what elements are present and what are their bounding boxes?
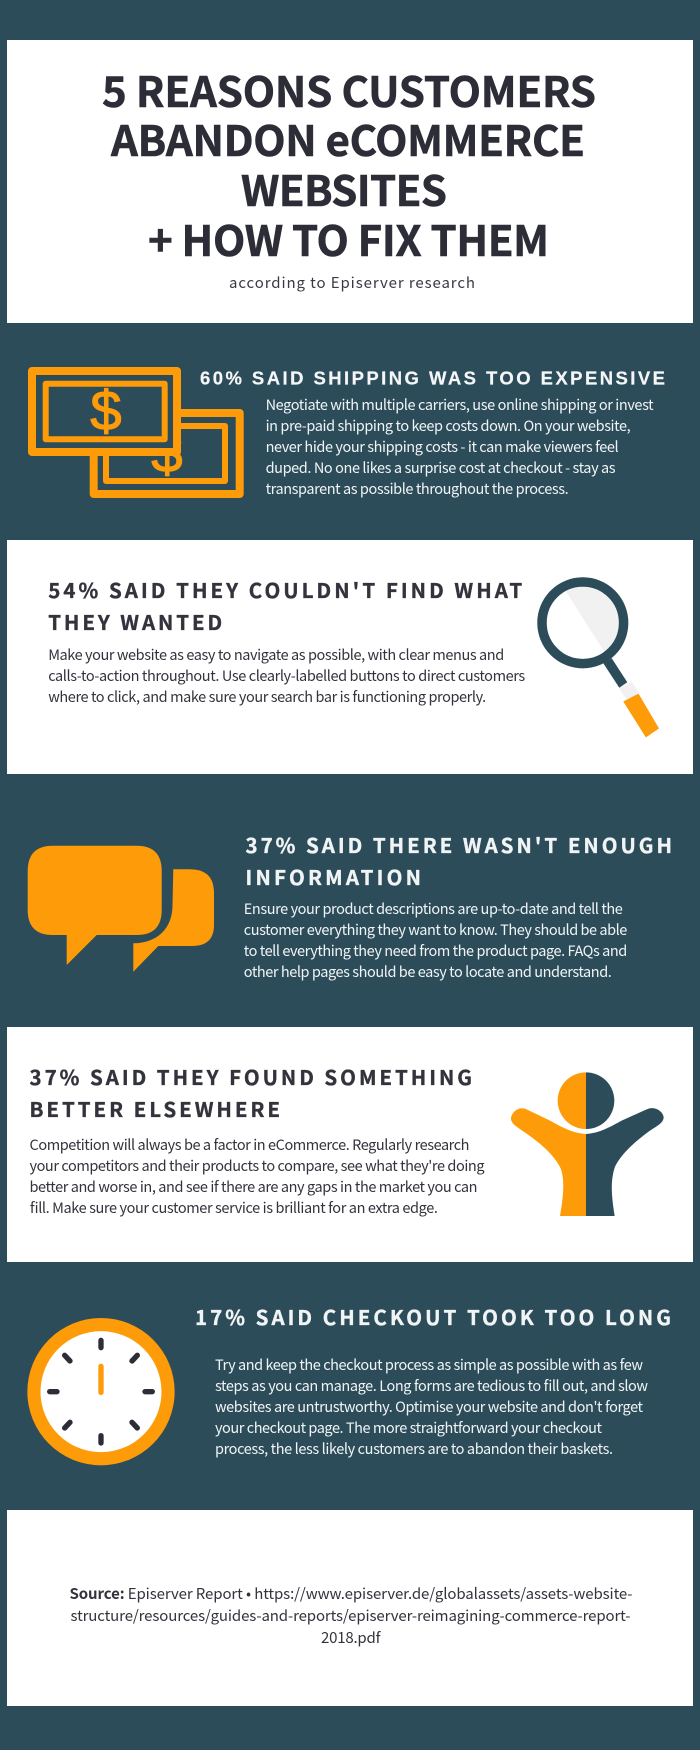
panel: competition	[7, 1027, 693, 1262]
text: competition: fill. Make sure your customer service is brilliant for an extra edge.	[30, 1197, 438, 1218]
text: checkout: steps as you can manage. Long forms are tedious to fill out, and slow	[215, 1375, 648, 1396]
text: information: Ensure your product descriptions are up-to-date and tell the	[244, 898, 623, 919]
heading: competition: 37% SAID THEY FOUND SOMETHING	[30, 1061, 472, 1091]
icon: clock	[27, 1318, 175, 1465]
heading: information: 37% SAID THERE WASN'T ENOUGH	[246, 829, 672, 859]
text: shipping: Negotiate with multiple carriers, use online shipping or invest	[266, 394, 654, 415]
subtitle: according to Episerver research	[229, 272, 475, 293]
text: shipping: never hide your shipping costs - it can make viewers feel	[266, 436, 619, 457]
title	[102, 59, 596, 269]
text: information: other help pages should be easy to locate and understand.	[244, 961, 612, 982]
source citation: structure/resources/guides-and-reports/episerver-reimagining-commerce-report-	[70, 1605, 630, 1626]
text: competition: better and worse in, and see if there are any gaps in the market you can	[30, 1176, 478, 1197]
heading: search: THEY WANTED	[48, 606, 222, 636]
panel: title	[7, 40, 693, 323]
title: WEBSITES	[241, 158, 447, 219]
source citation: 2018.pdf	[321, 1627, 382, 1648]
text: checkout: websites are untrustworthy. Optimise your website and don't forget	[215, 1396, 644, 1417]
text: checkout: process, the less likely customers are to abandon their baskets.	[215, 1438, 613, 1459]
panel: source	[7, 1510, 693, 1706]
heading: information	[246, 829, 672, 891]
icon: banknotes	[32, 371, 240, 494]
icon: speech bubbles	[28, 846, 214, 972]
heading: search: 54% SAID THEY COULDN'T FIND WHAT	[48, 574, 522, 604]
text: shipping: transparent as possible throughout the process.	[266, 478, 569, 499]
text: information	[244, 898, 627, 982]
heading: competition	[30, 1061, 472, 1123]
title: 5 REASONS CUSTOMERS	[102, 59, 596, 120]
title: + HOW TO FIX THEM	[148, 208, 549, 269]
text: checkout: your checkout page. The more straightforward your checkout	[215, 1417, 603, 1438]
text: search	[48, 644, 525, 707]
panel: information	[28, 829, 672, 982]
source citation	[70, 1583, 632, 1648]
heading: competition: BETTER ELSEWHERE	[30, 1093, 280, 1123]
text: shipping	[266, 394, 654, 499]
panel: shipping	[32, 368, 665, 499]
text: competition	[30, 1134, 484, 1218]
text: checkout: Try and keep the checkout process as simple as possible with as few	[215, 1354, 643, 1375]
text: competition: your competitors and their products to compare, see what they're doing	[30, 1155, 484, 1176]
text: competition: Competition will always be a factor in eCommerce. Regularly research	[30, 1134, 469, 1155]
panel: search	[7, 540, 693, 774]
text: search: calls-to-action throughout. Use clearly-labelled buttons to direct customers	[48, 665, 525, 686]
text: information: customer everything they want to know. They should be able	[244, 919, 627, 940]
source citation: Source: Episerver Report • https://www.episerver.de/globalassets/assets-website-	[70, 1583, 632, 1604]
panel: checkout	[27, 1301, 671, 1465]
text: shipping: in pre-paid shipping to keep costs down. On your website,	[266, 415, 631, 436]
text: shipping: duped. No one likes a surprise cost at checkout - stay as	[266, 457, 616, 478]
text: information: to tell everything they need from the product page. FAQs and	[244, 940, 627, 961]
heading: search	[48, 574, 522, 636]
icon: magnifying glass	[542, 582, 658, 737]
title: ABANDON eCOMMERCE	[110, 108, 585, 169]
heading: shipping: 60% SAID SHIPPING WAS TOO EXPENSIVE	[200, 368, 665, 388]
text: search: where to click, and make sure your search bar is functioning properly.	[48, 686, 486, 707]
text: search: Make your website as easy to navigate as possible, with clear menus and	[48, 644, 504, 665]
heading: information: INFORMATION	[246, 861, 421, 891]
heading: checkout: 17% SAID CHECKOUT TOOK TOO LONG	[195, 1301, 671, 1331]
text: checkout	[215, 1354, 648, 1459]
icon: banknotes: $	[90, 379, 122, 442]
icon: banknotes: $	[151, 421, 183, 484]
icon: person with raised arms	[511, 1072, 664, 1216]
